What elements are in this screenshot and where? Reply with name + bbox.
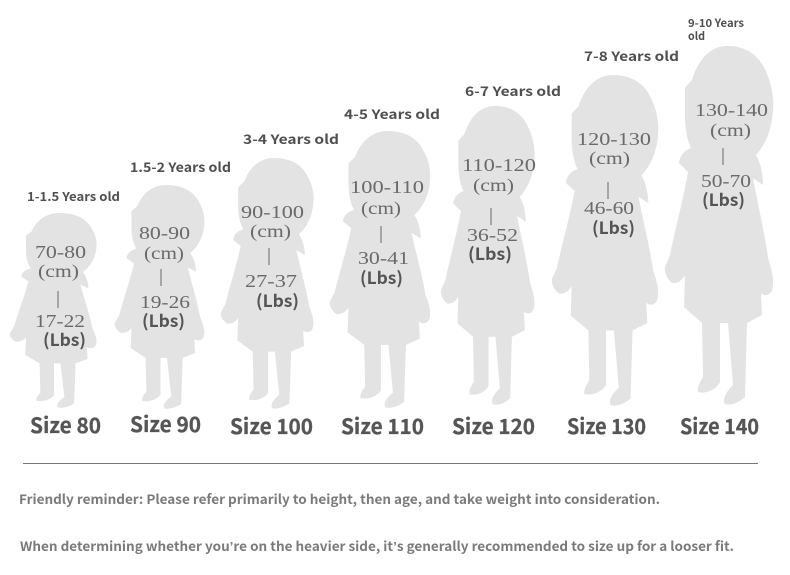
silhouette: size 100 — [221, 158, 314, 409]
measurements: size 110: 100-110 — [350, 177, 424, 197]
silhouette: size 80 — [10, 213, 97, 408]
silhouette: size 90 — [115, 185, 204, 409]
age label: 3-4 years: 3-4 Years old — [243, 129, 339, 148]
measurements: size 80: (cm) — [38, 261, 79, 281]
measurements: size 120: 36-52 — [467, 225, 518, 245]
measurements: size 90: (Lbs) — [142, 307, 185, 332]
size label: 130: Size 130 — [567, 411, 646, 441]
measurements: size 140: 50-70 — [701, 171, 751, 191]
size label: 100: Size 100 — [230, 411, 313, 441]
measurements: size 120: (cm) — [473, 175, 514, 195]
measurements: size 80: 70-80 — [35, 242, 86, 262]
size label: 110: Size 110 — [341, 411, 424, 441]
age label: 9-10 years — [688, 15, 745, 44]
measurements: size 80: (Lbs) — [43, 326, 86, 351]
age label: 7-8 years: 7-8 Years old — [584, 46, 679, 65]
silhouette: size 130 — [552, 75, 658, 406]
measurements: size 90 — [139, 223, 190, 332]
size label: 80: Size 80 — [30, 410, 101, 440]
age label: 9-10 years: 9-10 Years — [688, 15, 745, 31]
measurements: size 120: 110-120 — [462, 155, 536, 175]
measurements: size 80: 17-22 — [35, 311, 85, 331]
measurements: size 130 — [577, 129, 651, 239]
measurements: size 110: 30-41 — [358, 248, 409, 268]
measurements: size 100: (Lbs) — [256, 287, 299, 312]
age label: 4-5 years: 4-5 Years old — [344, 104, 440, 123]
measurements: size 130: (cm) — [589, 148, 630, 168]
measurements: size 100: (cm) — [250, 221, 291, 241]
silhouette: size 120 — [441, 106, 535, 405]
measurements: size 100: 90-100 — [241, 202, 304, 222]
measurements: size 110 — [350, 177, 424, 289]
measurements: size 90: (cm) — [144, 243, 184, 263]
measurements: size 120: (Lbs) — [468, 240, 512, 265]
measurements: size 110: (cm) — [361, 198, 401, 218]
age label: 1.5-2 years: 1.5-2 Years old — [130, 157, 231, 176]
reminder text: sizing priority: Friendly reminder: Please refer primarily to height, then age, and take weight into consideration. — [19, 489, 660, 508]
measurements: size 100 — [241, 202, 304, 312]
age label: 1-1.5 years: 1-1.5 Years old — [27, 188, 120, 205]
measurements: size 90: 80-90 — [139, 223, 190, 243]
measurements: size 140: (Lbs) — [702, 186, 745, 211]
measurements: size 130: 120-130 — [577, 129, 651, 149]
silhouette: size 110 — [330, 131, 430, 408]
measurements: size 80 — [35, 242, 86, 351]
size label: 90: Size 90 — [130, 409, 201, 439]
reminder text: size up advice: When determining whether you ’re on the heavier side, it ’s generally recommended to size up for a looser fit. — [20, 536, 734, 555]
measurements: size 130: 46-60 — [584, 198, 634, 218]
silhouette: size 140 — [665, 46, 773, 405]
measurements: size 120 — [462, 155, 536, 265]
age label: 6-7 years: 6-7 Years old — [465, 81, 561, 100]
size label: 120: Size 120 — [452, 411, 535, 441]
size label: 140: Size 140 — [680, 411, 759, 441]
measurements: size 140 — [695, 100, 768, 211]
measurements: size 90: 19-26 — [140, 292, 190, 312]
measurements: size 130: (Lbs) — [592, 214, 635, 239]
measurements: size 140: (cm) — [710, 120, 751, 140]
measurements: size 100: 27-37 — [245, 271, 297, 291]
measurements: size 140: 130-140 — [695, 100, 768, 120]
age label: 9-10 years: old — [688, 28, 705, 44]
measurements: size 110: (Lbs) — [360, 264, 403, 289]
